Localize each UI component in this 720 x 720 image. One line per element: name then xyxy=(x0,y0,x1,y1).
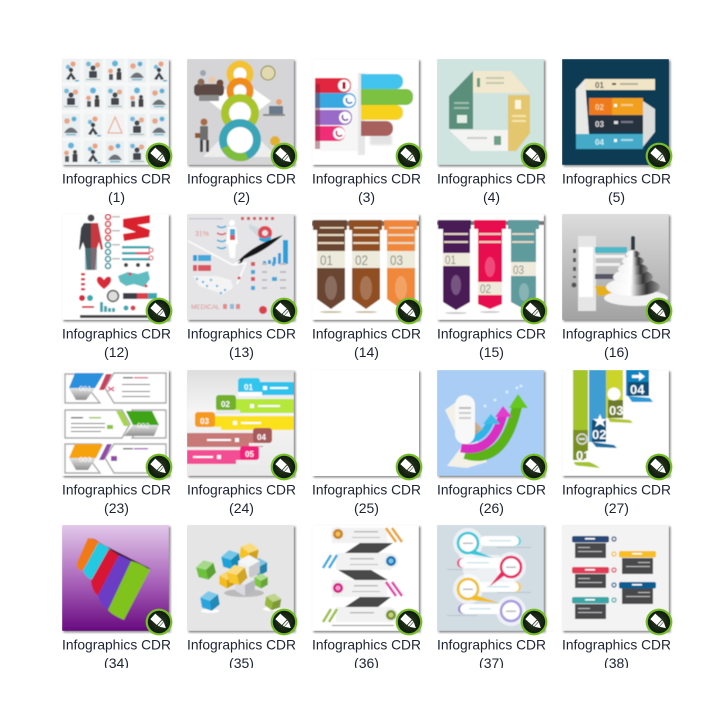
tile: Infographics CDR (2) xyxy=(187,59,297,205)
tile: Infographics CDR (34) xyxy=(62,525,172,671)
label xyxy=(437,636,546,671)
label: Infographics CDR xyxy=(62,170,171,186)
thumbnail: stacked 3D disc pyramid xyxy=(562,214,669,320)
label xyxy=(187,326,296,360)
label: (13) xyxy=(229,344,254,360)
label: Infographics CDR xyxy=(312,482,421,498)
badge: CorelDRAW pen icon xyxy=(271,454,297,480)
badge: CorelDRAW pen icon xyxy=(646,143,672,169)
label xyxy=(187,636,296,671)
tile: Infographics CDR (14) xyxy=(312,214,422,360)
label: Infographics CDR xyxy=(437,326,546,342)
thumbnail: purple, red and teal banners: 02 xyxy=(480,282,491,296)
badge: CorelDRAW pen icon xyxy=(146,609,172,635)
label: Infographics CDR xyxy=(187,326,296,342)
label: (24) xyxy=(229,500,254,516)
label xyxy=(562,170,671,205)
label: Infographics CDR xyxy=(562,482,671,498)
badge: CorelDRAW pen icon xyxy=(521,454,547,480)
label: (35) xyxy=(229,655,254,671)
badge: CorelDRAW pen icon xyxy=(521,609,547,635)
thumbnail: three brown and orange banners: 03 xyxy=(390,252,403,268)
tile: Infographics CDR (4) xyxy=(437,59,547,205)
thumbnail: five coloured step bars: 05 xyxy=(245,450,254,459)
label: Infographics CDR xyxy=(437,170,546,186)
thumbnail: three arrow steps 001 002 003: 003 xyxy=(79,455,92,464)
label: (1) xyxy=(108,189,125,205)
badge: CorelDRAW pen icon xyxy=(146,298,172,324)
label: Infographics CDR xyxy=(187,636,296,652)
badge: CorelDRAW pen icon xyxy=(271,298,297,324)
label: (36) xyxy=(354,655,379,671)
tile: Infographics CDR (15) xyxy=(437,214,547,360)
thumbnail: numbered folded banners on navy: 01 xyxy=(595,81,604,90)
label: Infographics CDR xyxy=(562,636,671,652)
tile: Infographics CDR (13) xyxy=(187,214,297,360)
thumbnail: five coloured step bars xyxy=(187,370,294,476)
thumbnail: four vertical numbered strips xyxy=(562,370,669,476)
label: Infographics CDR xyxy=(437,636,546,652)
thumbnail: medical dashboard xyxy=(187,214,294,320)
label xyxy=(437,482,546,516)
thumbnail: five coloured step bars: 01 xyxy=(244,383,253,392)
label xyxy=(312,326,421,360)
badge: CorelDRAW pen icon xyxy=(396,298,422,324)
label: (4) xyxy=(483,189,500,205)
label: (2) xyxy=(233,189,250,205)
tile: Infographics CDR (3) xyxy=(312,59,422,205)
label xyxy=(312,482,421,516)
thumbnail: ribbon banners xyxy=(312,59,419,165)
thumbnail: three arrow steps 001 002 003: 001 xyxy=(79,384,92,393)
badge: CorelDRAW pen icon xyxy=(646,298,672,324)
label xyxy=(312,170,421,205)
label: (23) xyxy=(104,500,129,516)
thumbnail: purple, red and teal banners xyxy=(437,214,544,320)
thumbnail: medical dashboard: 31% xyxy=(195,231,209,238)
label xyxy=(187,170,296,205)
label: Infographics CDR xyxy=(187,170,296,186)
tile: Infographics CDR (25) xyxy=(312,370,422,516)
thumbnail: blank white image xyxy=(312,370,419,476)
tile: Infographics CDR (1) xyxy=(62,59,172,205)
thumbnail: floating 3D cubes xyxy=(187,525,294,631)
thumbnail: numbered folded banners on navy: 02 xyxy=(595,103,604,112)
label: (5) xyxy=(608,189,625,205)
thumbnail: overlapping colour ribbons on purple xyxy=(62,525,169,631)
badge: CorelDRAW pen icon xyxy=(521,298,547,324)
thumbnail: folded octagon diagram xyxy=(437,59,544,165)
thumbnail: timeline of coloured tags and dark boxes xyxy=(562,525,669,631)
label: Infographics CDR xyxy=(562,326,671,342)
label: Infographics CDR xyxy=(312,326,421,342)
badge: CorelDRAW pen icon xyxy=(146,454,172,480)
tile: Infographics CDR (12) xyxy=(62,214,172,360)
label xyxy=(187,482,296,516)
label xyxy=(62,482,171,516)
label xyxy=(62,170,171,205)
thumbnail: numbered folded banners on navy: 04 xyxy=(595,138,604,147)
badge: CorelDRAW pen icon xyxy=(396,454,422,480)
thumbnail: grid of business infographics xyxy=(62,59,169,165)
thumbnail grid xyxy=(62,59,672,668)
label xyxy=(437,326,546,360)
tile: Infographics CDR (26) xyxy=(437,370,547,516)
thumbnail: four vertical numbered strips: 02 xyxy=(592,427,606,442)
label: Infographics CDR xyxy=(562,170,671,186)
label xyxy=(562,636,671,671)
badge: CorelDRAW pen icon xyxy=(521,143,547,169)
label: (38) xyxy=(604,655,629,671)
label xyxy=(437,170,546,205)
thumbnail: medical dashboard: MEDICAL xyxy=(191,304,220,311)
thumbnail: numbered folded banners on navy: 03 xyxy=(595,120,604,129)
tile: Infographics CDR (24) xyxy=(187,370,297,516)
thumbnail: three arrow steps 001 002 003: 002 xyxy=(137,421,150,430)
thumbnail: three brown and orange banners xyxy=(312,214,419,320)
thumbnail: purple, red and teal banners: 01 xyxy=(445,253,456,267)
badge: CorelDRAW pen icon xyxy=(396,143,422,169)
thumbnail: five coloured step bars: 03 xyxy=(200,417,209,426)
thumbnail: four vertical numbered strips: 01 xyxy=(576,448,590,463)
badge: CorelDRAW pen icon xyxy=(646,609,672,635)
thumbnail: zigzag process with coloured circles xyxy=(312,525,419,631)
label xyxy=(562,482,671,516)
badge: CorelDRAW pen icon xyxy=(271,609,297,635)
label: Infographics CDR xyxy=(312,636,421,652)
label: Infographics CDR xyxy=(312,170,421,186)
tile: Infographics CDR (35) xyxy=(187,525,297,671)
badge: CorelDRAW pen icon xyxy=(271,143,297,169)
label: (15) xyxy=(479,344,504,360)
label: (12) xyxy=(104,344,129,360)
badge: CorelDRAW pen icon xyxy=(646,454,672,480)
label: (14) xyxy=(354,344,379,360)
label: (34) xyxy=(104,655,129,671)
tile: Infographics CDR (5) xyxy=(562,59,672,205)
thumbnail: five coloured step bars: 02 xyxy=(221,400,230,409)
thumbnail: linked circles and pills timeline xyxy=(437,525,544,631)
label: (37) xyxy=(479,655,504,671)
thumbnail: three brown and orange banners: 02 xyxy=(355,252,368,268)
thumbnail: three arrow steps 001 002 003 xyxy=(62,370,169,476)
label xyxy=(562,326,671,360)
label: Infographics CDR xyxy=(187,482,296,498)
label: Infographics CDR xyxy=(62,636,171,652)
badge: CorelDRAW pen icon xyxy=(146,143,172,169)
tile: Infographics CDR (23) xyxy=(62,370,172,516)
tile: Infographics CDR (38) xyxy=(562,525,672,671)
label: Infographics CDR xyxy=(62,326,171,342)
label: (3) xyxy=(358,189,375,205)
label: (27) xyxy=(604,500,629,516)
thumbnail: four vertical numbered strips: 04 xyxy=(630,382,645,397)
label xyxy=(312,636,421,671)
thumbnail: purple, red and teal banners: 03 xyxy=(513,263,524,277)
tile: Infographics CDR (27) xyxy=(562,370,672,516)
thumbnail: number 8 business infographic xyxy=(187,59,294,165)
thumbnail: three brown and orange banners: 01 xyxy=(320,252,333,268)
thumbnail: four vertical numbered strips: 03 xyxy=(609,403,623,418)
label: (26) xyxy=(479,500,504,516)
label: (16) xyxy=(604,344,629,360)
label: Infographics CDR xyxy=(437,482,546,498)
label xyxy=(62,326,171,360)
thumbnail: five coloured step bars: 04 xyxy=(257,433,266,442)
tile: Infographics CDR (36) xyxy=(312,525,422,671)
thumbnail: medical infographic with human body xyxy=(62,214,169,320)
label: Infographics CDR xyxy=(62,482,171,498)
thumbnail: curved coloured arrows on blue xyxy=(437,370,544,476)
tile: Infographics CDR (16) xyxy=(562,214,672,360)
label xyxy=(62,636,171,671)
label: (25) xyxy=(354,500,379,516)
tile: Infographics CDR (37) xyxy=(437,525,547,671)
thumbnail: numbered folded banners on navy xyxy=(562,59,669,165)
badge: CorelDRAW pen icon xyxy=(396,609,422,635)
